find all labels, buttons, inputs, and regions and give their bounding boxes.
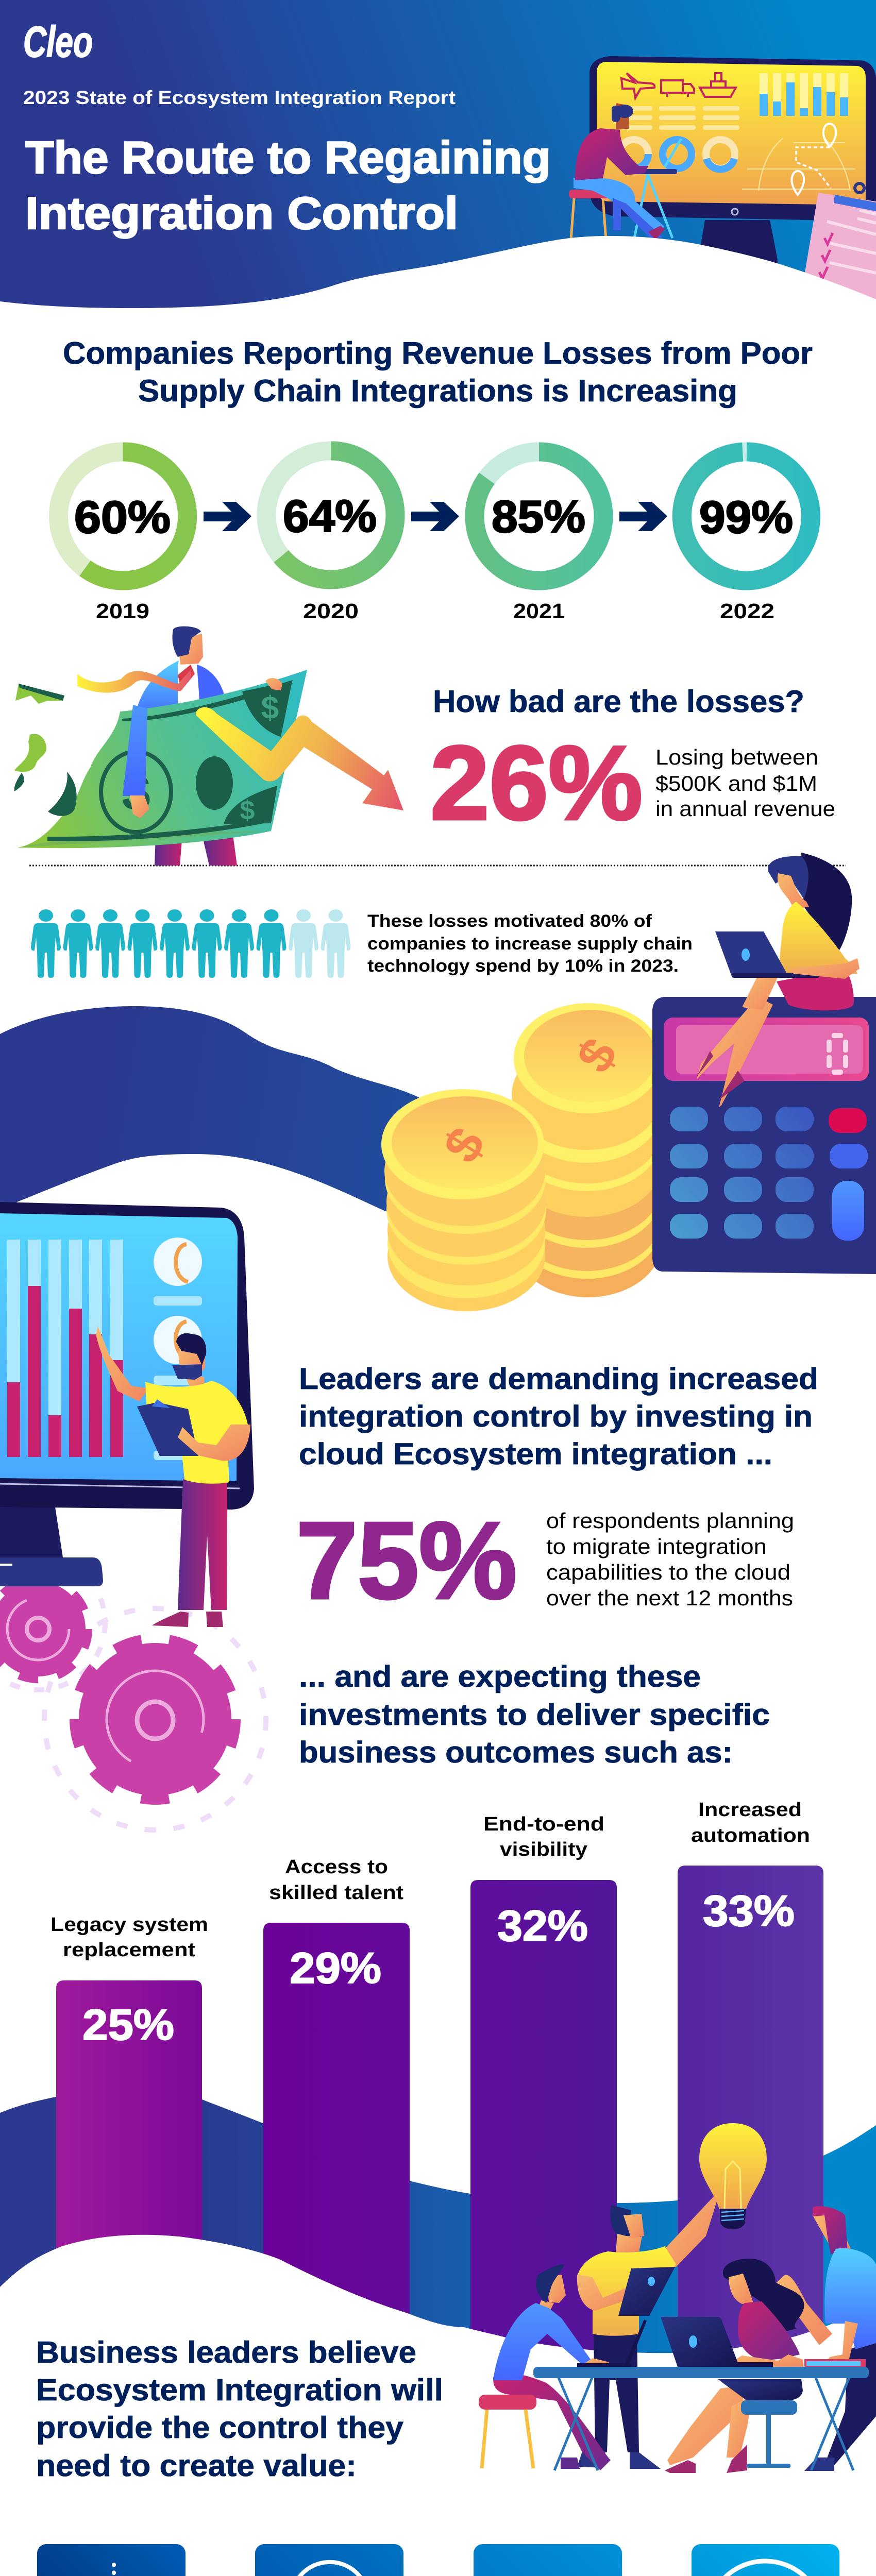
seated man at laptop (493, 2264, 611, 2470)
lower white wave (0, 2235, 876, 2524)
monitor (589, 56, 876, 222)
bar: increased automation: Increased (698, 1799, 802, 1821)
donut chart: 2019: 2019 (96, 599, 149, 623)
donut chart: 2022: 2022 (720, 599, 774, 623)
donut chart: 2021 (475, 452, 603, 623)
bar chart on monitor (7, 1240, 123, 1457)
text: respondents (546, 1509, 794, 1610)
torn banknote scraps (14, 684, 77, 816)
icon: prohibited exclamation (707, 2561, 823, 2576)
bar: increased automation (678, 1799, 823, 2370)
banknote: $ (261, 690, 279, 726)
bar: end-to-end visibility (470, 1814, 617, 2370)
bar: end-to-end visibility: visibility (500, 1839, 587, 1860)
donut chart: 2020: 2020 (303, 599, 359, 623)
stool (569, 190, 609, 240)
bar: access to skilled talent: skilled talent (269, 1882, 403, 1904)
illustration: calculator (652, 997, 876, 1274)
heading: expecting investments: ... and are expecting these (299, 1660, 701, 1693)
stat: 75%: 75% (296, 1499, 517, 1621)
illustration: woman on calculator (697, 853, 860, 1108)
heading: expecting investments: investments to deliver specific (299, 1698, 770, 1732)
icons: plane, truck, ship (621, 73, 736, 98)
woman at table (661, 2259, 804, 2473)
gauges on monitor (154, 1238, 202, 1460)
donut gauges on monitor (619, 140, 735, 170)
illustration: light bulb (699, 2123, 767, 2229)
illustration: front coin stack: $ (432, 1117, 496, 1173)
illustration: businessman with torn banknote (14, 626, 403, 866)
gears (0, 1556, 266, 1830)
bar: legacy system replacement: replacement (63, 1939, 195, 1961)
text: how bad heading: How bad are the losses? (433, 684, 804, 719)
text: losses motivated: technology spend by 10% in 2023. (367, 956, 679, 976)
arm and hands (123, 678, 282, 818)
icon: coin in pot (291, 2562, 368, 2576)
banknote: $ (240, 795, 255, 825)
monitor stand (698, 220, 779, 268)
heading: business leaders: Business leaders believe (36, 2335, 416, 2369)
text: losing between: in annual revenue (655, 796, 835, 821)
clipboard (799, 183, 876, 309)
calculator buttons (670, 1107, 868, 1241)
banknote: $ (122, 764, 150, 821)
heading: revenue losses: Companies Reporting Revenue Losses from Poor (63, 336, 813, 370)
illustration: team at table (479, 2196, 876, 2473)
panel: header background (0, 0, 876, 319)
map with pins on monitor (742, 124, 855, 195)
icon row: 8 of 10 people (31, 909, 350, 978)
heading: business leaders: provide the control they (36, 2411, 403, 2445)
legs (155, 835, 237, 866)
heading: expecting investments (299, 1660, 770, 1769)
header wave (0, 236, 876, 322)
bar: end-to-end visibility: 32% (497, 1902, 588, 1950)
man with clipboard (96, 1326, 250, 1627)
heading: leaders demanding (299, 1362, 818, 1471)
illustration: monitor with chart (0, 1202, 254, 1627)
right standing man (769, 2206, 876, 2471)
calculator screen (664, 1018, 869, 1081)
books (804, 2359, 866, 2367)
bar: access to skilled talent: 29% (290, 1944, 381, 1992)
stat: 26%: 26% (430, 724, 643, 842)
gear: large (79, 1643, 231, 1795)
donut chart: 2019: 60% (74, 492, 171, 543)
title: Integration Control (25, 188, 458, 239)
bar: legacy system replacement: 25% (82, 2001, 174, 2049)
table (533, 2367, 869, 2470)
heading: expecting investments: business outcomes such as: (299, 1736, 733, 1769)
head (172, 626, 203, 665)
panel: cost savings (37, 2544, 186, 2576)
heading: revenue losses (63, 336, 813, 408)
text: report name: 2023 State of Ecosystem Integration Report (23, 87, 456, 108)
shirt and torso (77, 660, 227, 732)
text: respondents: to migrate integration (546, 1534, 767, 1558)
heading: revenue losses: Supply Chain Integrations is Increasing (138, 374, 737, 408)
bar: end-to-end visibility: End-to-end (483, 1814, 604, 1835)
heading: leaders demanding: cloud Ecosystem integration ... (299, 1437, 772, 1471)
text: losses motivated (367, 911, 693, 976)
red stool (479, 2395, 536, 2468)
arrow (619, 502, 667, 531)
text: losing between (655, 745, 835, 821)
person at laptop (569, 103, 681, 240)
arrow: falling trend (196, 707, 403, 810)
text: respondents: capabilities to the cloud (546, 1560, 790, 1584)
illustration: back coin stack (512, 1003, 662, 1297)
title (25, 132, 551, 239)
title: The Route to Regaining (25, 132, 551, 183)
laptops (577, 2319, 647, 2367)
standing man with tablet (577, 2196, 717, 2469)
arrow (411, 502, 459, 531)
panel: improved profitability (255, 2544, 403, 2576)
data rows on monitor (621, 106, 739, 130)
donut chart: 2021: 2021 (513, 599, 565, 623)
panel: increased revenue (474, 2544, 622, 2576)
heading: leaders demanding: integration control by investing in (299, 1400, 813, 1433)
donut chart: 2022: 99% (699, 492, 793, 543)
monitor body (0, 1202, 254, 1510)
donut chart: 2021: 85% (492, 491, 585, 542)
logo: Cleo header: Cleo (23, 18, 93, 66)
illustration: front coin stack (381, 1089, 546, 1311)
heading: leaders demanding: Leaders are demanding increased (299, 1362, 818, 1396)
bar: legacy system replacement: Legacy system (50, 1914, 208, 1936)
text: losing between: Losing between (655, 745, 818, 769)
bar: increased automation: 33% (703, 1887, 795, 1935)
bar chart: business outcomes (50, 1799, 823, 2370)
illustration: back coin stack: $ (565, 1028, 628, 1082)
bar chart on monitor (760, 73, 848, 116)
bar: access to skilled talent: Access to (285, 1856, 388, 1878)
wave band: lower (0, 2091, 876, 2421)
bar: legacy system replacement (50, 1914, 208, 2370)
donut chart: 2022 (682, 452, 811, 623)
text: respondents: of respondents planning (546, 1509, 794, 1533)
table (625, 139, 681, 238)
donut chart: 2020 (266, 451, 395, 623)
arrow (204, 502, 251, 531)
text: losses motivated: These losses motivated 80% of (367, 911, 652, 931)
text: losing between: $500K and $1M (655, 771, 817, 795)
heading: business leaders: need to create value: (36, 2449, 357, 2483)
wave band: middle (0, 1006, 515, 1236)
heading: business leaders (36, 2335, 443, 2483)
text: respondents: over the next 12 months (546, 1586, 793, 1610)
donut chart: 2020: 64% (283, 490, 377, 541)
divider (29, 865, 846, 867)
banknote (17, 670, 307, 848)
text: losses motivated: companies to increase supply chain (367, 934, 693, 954)
icon: coin with rays (57, 2565, 172, 2576)
heading: business leaders: Ecosystem Integration will (36, 2373, 443, 2407)
bar: access to skilled talent (263, 1856, 410, 2370)
panel: avoid violation penalties (689, 2544, 844, 2576)
panel: hero illustration (569, 56, 876, 309)
monitor stand and base (0, 1507, 103, 1586)
donut chart: 2019 (59, 452, 188, 623)
bar: increased automation: automation (691, 1825, 810, 1846)
gear: small (0, 1582, 86, 1676)
